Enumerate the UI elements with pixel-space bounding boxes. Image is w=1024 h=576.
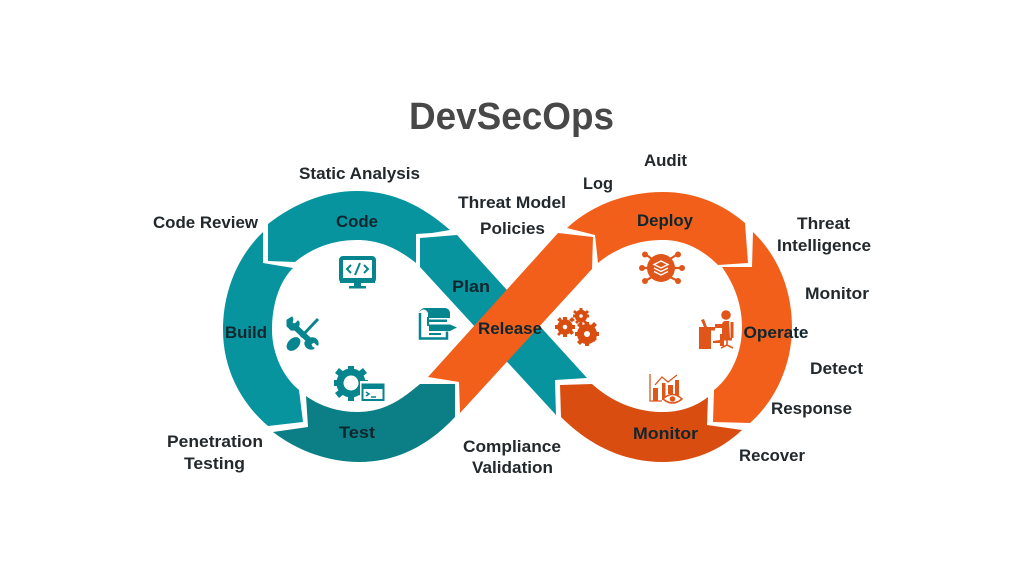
- segment: test: [273, 384, 455, 462]
- label: Response: Response: [771, 399, 852, 418]
- label: Compliance Validation: [463, 437, 561, 477]
- label: Monitor outer: Monitor: [805, 284, 869, 303]
- segment: operate: [713, 232, 808, 423]
- icon: chart and eye: [650, 374, 682, 403]
- icon: virus stack: [639, 252, 685, 284]
- label: Threat Model: Threat Model: [458, 193, 566, 212]
- icon: gears: [555, 308, 599, 346]
- segment: code: [268, 191, 450, 263]
- segment: monitor: [560, 384, 742, 462]
- segment: deploy: [567, 192, 748, 265]
- label: Threat Intelligence: Threat: [797, 214, 850, 233]
- label: Deploy: Deploy: [637, 211, 694, 230]
- label: Threat Intelligence: Intelligence: [777, 236, 871, 255]
- icon: person at desk: [699, 310, 734, 349]
- icon: gear and terminal: [334, 366, 386, 402]
- label: Code: Code: [336, 212, 378, 231]
- label: Build: Build: [225, 323, 267, 342]
- label: Release: Release: [478, 319, 542, 338]
- title: DevSecOps: [409, 96, 614, 138]
- label: Policies: Policies: [480, 219, 545, 238]
- label: Audit: Audit: [644, 151, 687, 170]
- label: Penetration Testing: Penetration: [167, 432, 263, 451]
- segment: plan: [420, 235, 587, 415]
- label: Threat Intelligence: [777, 214, 871, 255]
- label: Compliance Validation: Compliance: [463, 437, 561, 456]
- label: Plan: Plan: [452, 277, 490, 296]
- label: Static Analysis: Static Analysis: [299, 164, 420, 183]
- segment: release: [428, 233, 593, 413]
- label: Code Review: Code Review: [153, 213, 259, 232]
- segment: build: [223, 232, 303, 426]
- label: Penetration Testing: [167, 432, 263, 473]
- label: Penetration Testing: Testing: [184, 454, 245, 473]
- label: Monitor: Monitor: [633, 424, 698, 443]
- label: Test: Test: [339, 423, 375, 442]
- label: Detect: Detect: [810, 359, 863, 378]
- icon: plan document: [419, 308, 457, 338]
- label: Log: Log: [583, 174, 613, 193]
- label: Compliance Validation: Validation: [472, 458, 553, 477]
- icon: wrench and screwdriver: [285, 317, 318, 353]
- label: Recover: Recover: [739, 446, 805, 465]
- label: Operate: Operate: [744, 323, 808, 342]
- icon: code monitor: [340, 258, 375, 288]
